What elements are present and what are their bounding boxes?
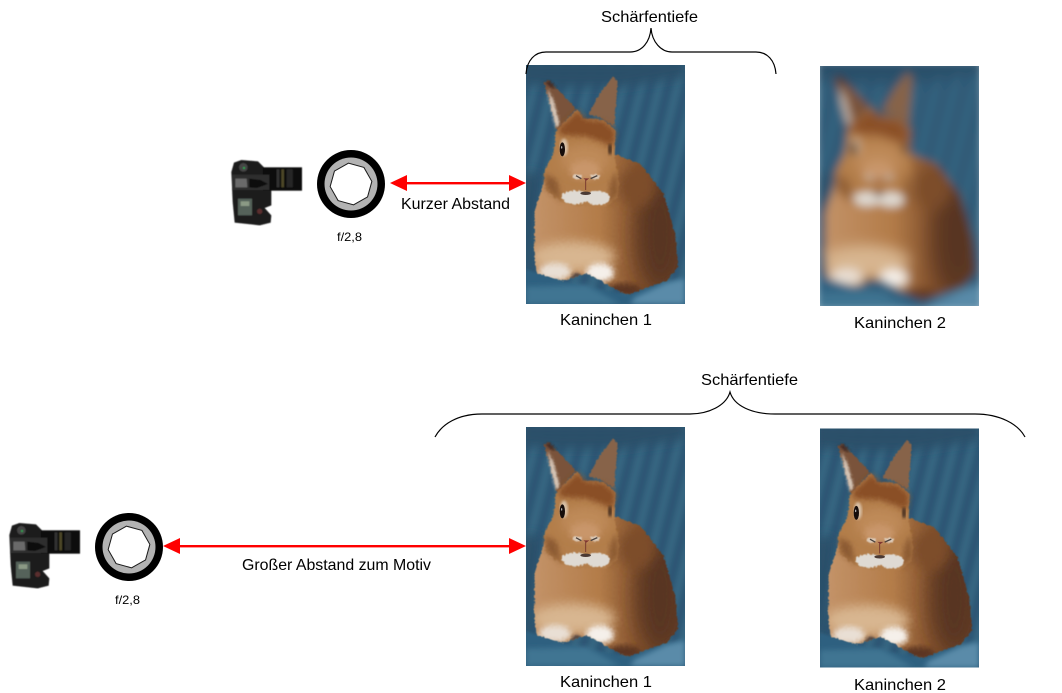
photo: blurred Kaninchen 2 top	[810, 55, 988, 314]
arrow: short distance	[390, 175, 526, 191]
caption: Kaninchen 2 top: Kaninchen 2	[854, 315, 946, 332]
brace: Schärfentiefe top	[526, 28, 776, 74]
camera bottom	[9, 523, 80, 588]
label: Kurzer Abstand: Kurzer Abstand	[401, 196, 510, 213]
arrow: long distance	[163, 538, 526, 554]
photo: Kaninchen 1 top	[520, 60, 690, 307]
caption: Kaninchen 1 top: Kaninchen 1	[560, 312, 652, 329]
heading: Schärfentiefe top: Schärfentiefe	[601, 9, 698, 26]
aperture bottom	[95, 513, 163, 581]
caption: Kaninchen 1 bottom: Kaninchen 1	[560, 674, 652, 691]
camera top	[231, 160, 302, 225]
label: Großer Abstand zum Motiv: Großer Abstand zum Motiv	[242, 557, 431, 574]
photo: Kaninchen 2 bottom	[814, 424, 984, 670]
label: f/2,8 top: f/2,8	[337, 230, 362, 244]
aperture top	[317, 150, 385, 218]
label: f/2,8 bottom: f/2,8	[115, 593, 140, 607]
brace: Schärfentiefe bottom	[435, 392, 1025, 437]
photo: Kaninchen 1 bottom	[520, 422, 690, 669]
heading: Schärfentiefe bottom: Schärfentiefe	[701, 372, 798, 389]
